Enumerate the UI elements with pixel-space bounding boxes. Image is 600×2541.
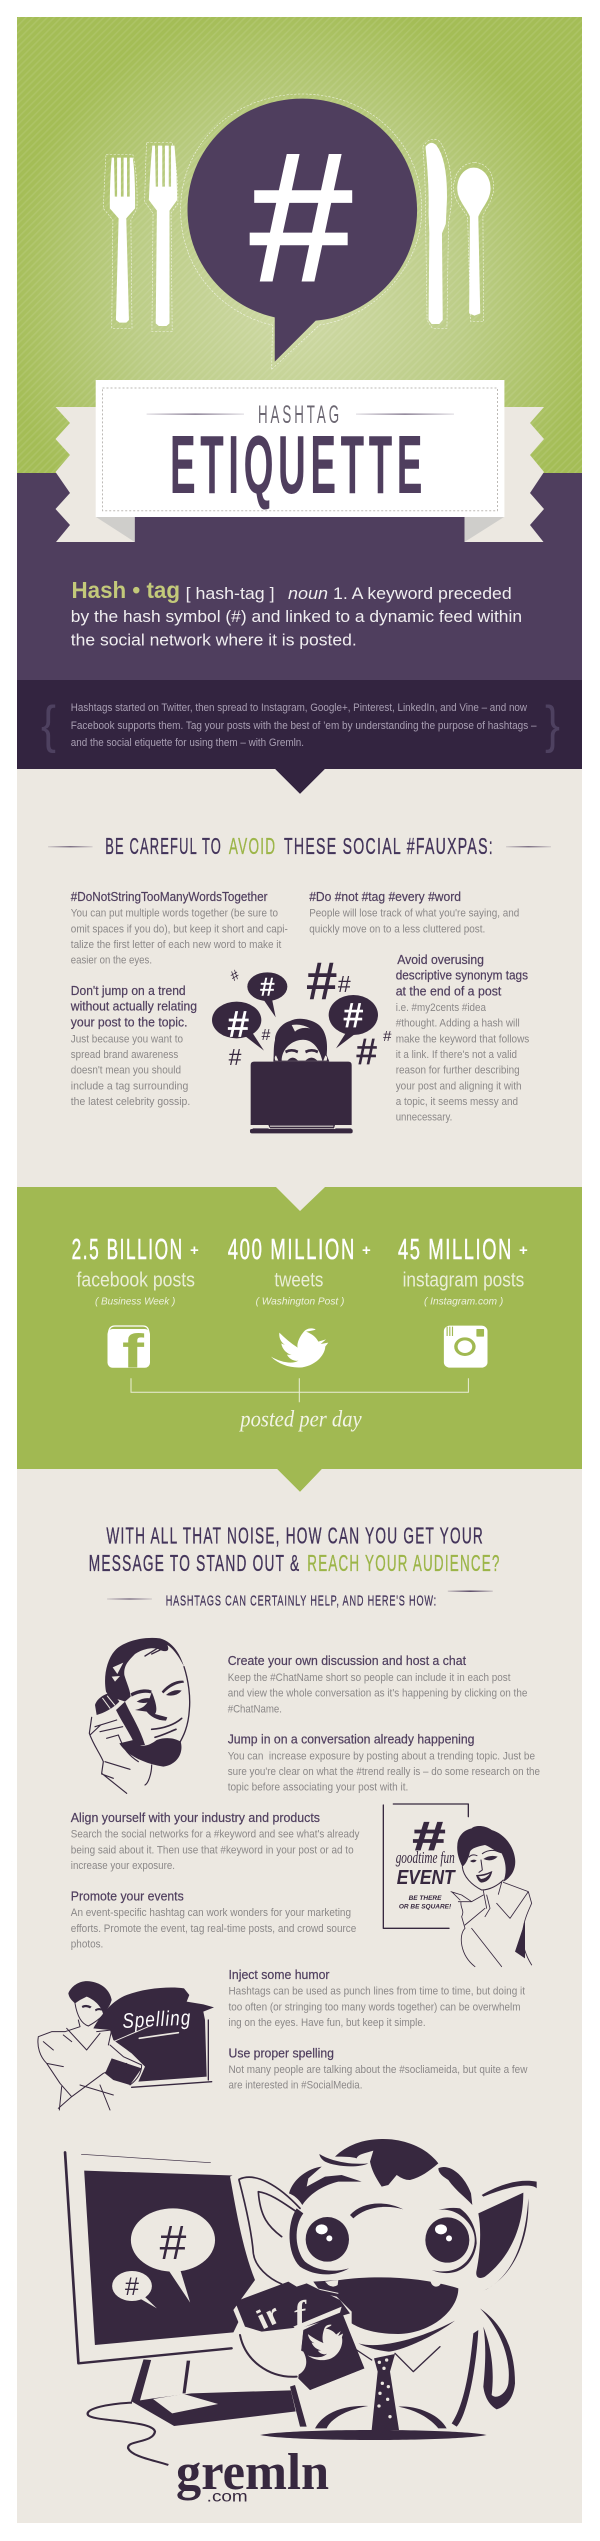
text: definition of hashtag: noun xyxy=(288,584,328,603)
text: avoid overusing synonym tags: your post and aligning it with xyxy=(396,1080,522,1092)
icon: small fork xyxy=(103,154,137,328)
text: definition of hashtag xyxy=(71,577,522,650)
text: inject some humor xyxy=(228,1967,525,2029)
stat: facebook: facebook posts xyxy=(76,1269,195,1292)
text: promote your events: Promote your events xyxy=(71,1888,184,1903)
text: jump in on a conversation xyxy=(228,1731,540,1794)
text: intro paragraph with braces: and the social etiquette for using them – with Gremln. xyxy=(71,737,304,749)
text: do not jump on a trend: doesn't mean you should xyxy=(71,1065,181,1077)
icon: spoon xyxy=(453,163,494,322)
text: avoid overusing synonym tags: descriptive synonym tags xyxy=(396,968,528,983)
hash marks around man: # xyxy=(228,1004,249,1045)
stat: facebook: + xyxy=(190,1242,199,1259)
stat: twitter: tweets xyxy=(274,1269,323,1292)
heading: HASHTAG: HASHTAG xyxy=(258,401,342,429)
text: do not string too many words: easier on the eyes. xyxy=(71,955,152,967)
stat: twitter: + xyxy=(362,1242,371,1259)
illustration: place setting with speech bubble xyxy=(103,94,494,369)
bubble on screen xyxy=(112,2208,215,2308)
hash marks on screen: # xyxy=(160,2217,187,2270)
text: avoid overusing synonym tags: make the keyword that follows xyxy=(396,1033,529,1045)
stat: instagram: ( Instagram.com ) xyxy=(424,1295,503,1307)
hash marks around man: # xyxy=(344,997,363,1035)
icon: speech bubble xyxy=(181,94,422,369)
hash marks on screen xyxy=(125,2217,187,2301)
head with hair xyxy=(273,1019,329,1062)
heading: faux pas: BE CAREFUL TO xyxy=(105,833,222,859)
card letters: ir xyxy=(252,2299,285,2335)
text: align yourself: increase your exposure. xyxy=(71,1860,175,1872)
text: do not tag every word xyxy=(309,889,519,935)
stat: instagram: + xyxy=(519,1242,528,1259)
text: use proper spelling xyxy=(228,2045,528,2092)
text: avoid overusing synonym tags: Avoid overusing xyxy=(397,952,484,967)
illustration: woman with event poster xyxy=(383,1804,532,1967)
text: align yourself xyxy=(71,1810,360,1872)
text: promote your events: photos. xyxy=(71,1939,103,1951)
title card xyxy=(96,380,504,517)
hash marks around man: # xyxy=(357,1031,377,1072)
poster text: goodtime fun xyxy=(396,1848,455,1867)
text: definition of hashtag: by the hash symbol (#) and linked to a dynamic feed within xyxy=(71,607,522,626)
text: intro paragraph with braces xyxy=(41,696,560,754)
panel: dark intro band xyxy=(17,680,582,794)
panel: cream faux pas section xyxy=(17,769,582,1211)
heading: faux pas: AVOID xyxy=(229,833,276,859)
ribbon right xyxy=(464,407,544,542)
text: intro paragraph with braces: { xyxy=(41,696,56,754)
text: do not jump on a trend: spread brand awareness xyxy=(71,1049,178,1061)
icon: large fork xyxy=(145,142,178,332)
text: do not jump on a trend: the latest celebrity gossip. xyxy=(71,1096,190,1108)
illustration: man on telephone xyxy=(89,1638,190,1793)
text: do not jump on a trend: Don't jump on a trend xyxy=(71,983,186,998)
text: use proper spelling: Use proper spelling xyxy=(228,2045,334,2060)
text: do not jump on a trend: include a tag surrounding xyxy=(71,1080,188,1092)
text: do not jump on a trend xyxy=(70,983,197,1108)
silhouette xyxy=(230,2150,537,2430)
hash marks around man: # xyxy=(262,1027,271,1044)
poster text: BE THERE xyxy=(409,1895,442,1902)
text: jump in on a conversation: Jump in on a conversation already happening xyxy=(228,1731,474,1746)
text: avoid overusing synonym tags: it a link. If there's not a valid xyxy=(396,1049,517,1061)
stat: twitter xyxy=(228,1234,371,1307)
chalkboard xyxy=(93,1987,214,2082)
text: do not string too many words: You can put multiple words together (be sure to xyxy=(71,908,278,920)
text: avoid overusing synonym tags: unnecessary. xyxy=(396,1112,452,1124)
ribbon left xyxy=(56,407,135,542)
poster text xyxy=(396,1813,456,1910)
logo: gremln.com: gremln xyxy=(176,2444,329,2501)
text: posted per day: posted per day xyxy=(239,1407,362,1432)
mouth xyxy=(313,2277,458,2352)
speech bubbles xyxy=(212,972,378,1051)
stat: instagram xyxy=(398,1234,528,1307)
text: use proper spelling: are interested in #SocialMedia. xyxy=(228,2080,362,2092)
icon: facebook xyxy=(108,1325,150,1378)
hash marks on screen: # xyxy=(125,2273,139,2301)
icon: twitter bird xyxy=(271,1328,328,1368)
text: avoid overusing synonym tags: #thought. Adding a hash will xyxy=(396,1018,520,1030)
text: do not tag every word: People will lose track of what you're saying, and xyxy=(309,908,519,920)
text: create your own discussion: Create your own discussion and host a chat xyxy=(228,1653,466,1668)
text: create your own discussion: and view the whole conversation as it's happening by clicking on the xyxy=(228,1688,527,1700)
text: inject some humor: Inject some humor xyxy=(228,1967,330,1982)
text: jump in on a conversation: topic before associating your post with it. xyxy=(228,1782,408,1794)
text: use proper spelling: Not many people are talking about the #socliameida, but quite a few xyxy=(228,2064,528,2076)
card letters xyxy=(252,2293,312,2335)
text: inject some humor: too often (or stringing too many words together) can be overwhelm xyxy=(228,2001,521,2013)
logo: gremln.com: .com xyxy=(207,2489,248,2506)
panel: green statistics band xyxy=(17,1187,582,1492)
heading: with all that noise: MESSAGE TO STAND OUT & xyxy=(89,1550,300,1576)
card letters: f xyxy=(290,2293,312,2335)
text: definition of hashtag: [ hash-tag ] xyxy=(186,584,275,603)
text: do not jump on a trend: without actually relating xyxy=(70,999,197,1014)
text: do not tag every word: quickly move on to a less cluttered post. xyxy=(309,923,485,935)
heading: faux pas xyxy=(48,833,551,859)
icon: facebook: f xyxy=(122,1325,144,1378)
text: align yourself: Align yourself with your industry and products xyxy=(71,1810,320,1825)
stat: twitter: 400 MILLION xyxy=(228,1234,356,1266)
bracket: joins the three stats xyxy=(131,1378,468,1402)
poster text: OR BE SQUARE! xyxy=(399,1903,452,1910)
illustration: teacher at chalkboard xyxy=(38,1981,214,2110)
icon: hash symbol in bubble: # xyxy=(250,115,352,319)
text: avoid overusing synonym tags xyxy=(396,952,529,1124)
subheading: hashtags can help: HASHTAGS CAN CERTAINLY HELP, AND HERE'S HOW: xyxy=(166,1593,437,1610)
heading: with all that noise xyxy=(89,1522,501,1576)
text: avoid overusing synonym tags: a topic, it seems messy and xyxy=(396,1096,518,1108)
hair xyxy=(289,2139,472,2205)
text: do not string too many words xyxy=(71,889,288,967)
teacher figure xyxy=(38,1981,178,2110)
text: avoid overusing synonym tags: i.e. #my2cents #idea xyxy=(396,1002,486,1014)
text: jump in on a conversation: You can increase exposure by posting about a trending topic. Just be xyxy=(228,1750,535,1762)
text: align yourself: Search the social networks for a #keyword and see what's already xyxy=(71,1829,360,1841)
hash marks around man: # xyxy=(383,1028,392,1045)
hash marks around man: # xyxy=(338,971,351,997)
text: do not string too many words: #DoNotStringTooManyWordsTogether xyxy=(71,889,268,904)
stat: facebook: 2.5 BILLION xyxy=(72,1234,184,1266)
hash marks around man: # xyxy=(260,974,274,1002)
icon: knife xyxy=(423,139,452,328)
hash marks around man xyxy=(227,953,392,1072)
text: avoid overusing synonym tags: reason for further describing xyxy=(396,1065,520,1077)
text: do not string too many words: omit spaces if you do), but keep it short and capi- xyxy=(71,923,288,935)
icon: instagram xyxy=(444,1326,487,1368)
panel: cream how-to section xyxy=(17,1469,582,2523)
text: inject some humor: Hashtags can be used as punch lines from time to time, but doing it xyxy=(228,1986,525,1998)
text: do not string too many words: talize the first letter of each new word to make it xyxy=(71,939,281,951)
poster frame xyxy=(383,1804,468,1928)
text: intro paragraph with braces: } xyxy=(545,696,560,754)
poster text: # xyxy=(412,1813,446,1859)
stat: facebook: ( Business Week ) xyxy=(95,1295,175,1307)
stat: twitter: ( Washington Post ) xyxy=(256,1295,344,1307)
text: promote your events: efforts. Promote the event, tag real-time posts, and crowd source xyxy=(71,1923,356,1935)
social cards and hand xyxy=(235,2282,364,2390)
text: do not jump on a trend: Just because you want to xyxy=(71,1033,183,1045)
tie and collar xyxy=(357,2347,440,2430)
illustration: man behind laptop with hash bubbles xyxy=(212,953,392,1133)
ears xyxy=(239,2177,537,2292)
stat: instagram: instagram posts xyxy=(403,1269,524,1292)
stat: facebook xyxy=(72,1234,199,1307)
text: definition of hashtag: Hash • tag xyxy=(72,577,180,603)
eyes xyxy=(290,2203,477,2274)
body and arm xyxy=(260,2308,515,2440)
hash marks around man: # xyxy=(229,1044,242,1070)
chalkboard word: Spelling xyxy=(122,2006,192,2033)
text: intro paragraph with braces: Facebook supports them. Tag your posts with the best of ’em by understanding the purpose of hashtags – xyxy=(71,720,537,732)
text: inject some humor: ing on the eyes. Have fun, but keep it simple. xyxy=(228,2017,426,2029)
poster text: EVENT xyxy=(397,1867,456,1889)
hash marks around man: # xyxy=(227,966,242,984)
text: align yourself: being said about it. Then use that #keyword in your post or ad to xyxy=(71,1844,354,1856)
panel: purple definition band xyxy=(17,473,582,680)
text: promote your events: An event-specific hashtag can work wonders for your marketing xyxy=(71,1907,351,1919)
text: do not tag every word: #Do #not #tag #every #word xyxy=(309,889,461,904)
woman figure xyxy=(451,1826,532,1967)
text: intro paragraph with braces: Hashtags started on Twitter, then spread to Instagram, Google+, Pinterest, LinkedIn, and Vine – and now xyxy=(71,702,527,714)
text: jump in on a conversation: sure you're clear on what the #trend really is – do some research on the xyxy=(228,1766,540,1778)
text: do not jump on a trend: your post to the topic. xyxy=(71,1014,188,1029)
gremlin figure xyxy=(230,2139,537,2440)
illustration: gremlin mascot at computer xyxy=(65,2139,537,2465)
monitor xyxy=(65,2152,302,2465)
text: create your own discussion: #ChatName. xyxy=(228,1703,282,1715)
text: avoid overusing synonym tags: at the end of a post xyxy=(396,983,502,998)
text: create your own discussion xyxy=(228,1653,527,1715)
text: create your own discussion: Keep the #ChatName short so people can include it in each post xyxy=(228,1672,511,1684)
text: promote your events xyxy=(71,1888,356,1951)
text: definition of hashtag: 1. A keyword preceded xyxy=(333,584,512,603)
stat: instagram: 45 MILLION xyxy=(398,1234,513,1266)
banner: title card with ribbon xyxy=(56,380,544,542)
hash marks around man: # xyxy=(307,953,336,1011)
panel: green header xyxy=(17,17,582,473)
laptop xyxy=(250,1062,353,1133)
text: definition of hashtag: the social network where it is posted. xyxy=(71,631,357,650)
